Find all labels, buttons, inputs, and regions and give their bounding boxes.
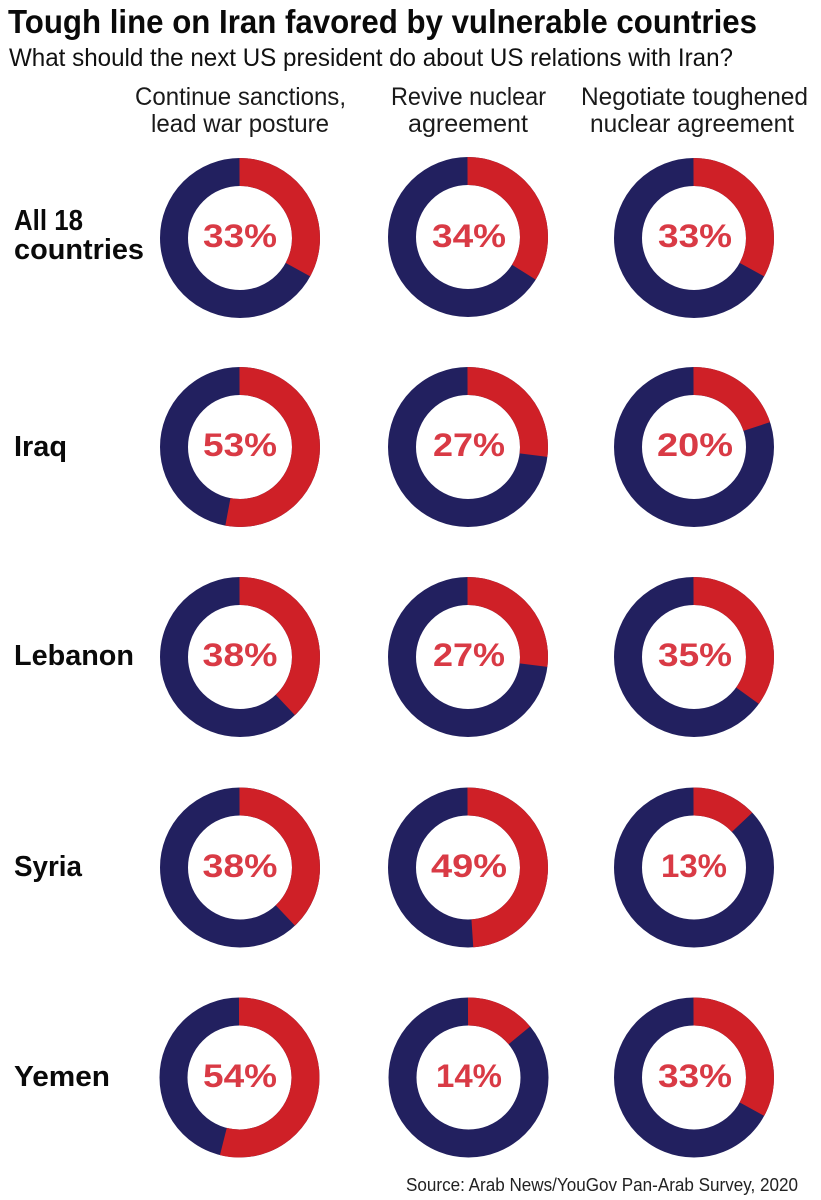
column heading: negotiate toughened nuclear agreement: Negotiate toughened	[581, 83, 808, 111]
donut: Lebanon, revive 27%: 27%	[433, 637, 505, 673]
column heading: negotiate toughened nuclear agreement: nuclear agreement	[590, 110, 794, 138]
title: Tough line on Iran favored by vulnerable countries	[8, 3, 757, 40]
donut: Syria, revive 49%: 49%	[431, 848, 507, 884]
donut: all 18, continue sanctions 33%: 33%	[203, 218, 277, 254]
donut: Syria, continue sanctions 38%	[174, 802, 306, 934]
subtitle: What should the next US president do about US relations with Iran?	[9, 44, 733, 72]
donut: Syria, negotiate 13%: 13%	[661, 848, 727, 884]
donut: Yemen, negotiate 33%	[628, 1012, 760, 1144]
donut: all 18, negotiate 33%: 33%	[658, 218, 732, 254]
column heading: continue sanctions: Continue sanctions,	[135, 83, 346, 111]
donut: Syria, continue sanctions 38%: 38%	[202, 848, 278, 884]
source note: Source: Arab News/YouGov Pan-Arab Survey, 2020	[406, 1175, 798, 1195]
donut: Yemen, continue sanctions 54%: 54%	[203, 1058, 277, 1094]
donut: Syria, revive 49%	[402, 802, 534, 934]
column heading: continue sanctions: lead war posture	[151, 110, 329, 138]
donut: Iraq, continue sanctions 53%: 53%	[203, 427, 277, 463]
row label: Iraq: Iraq	[14, 431, 67, 463]
donut: Iraq, revive 27%	[402, 381, 534, 513]
row label: Syria: Syria	[14, 851, 83, 883]
donut: Iraq, negotiate 20%	[628, 381, 760, 513]
row label: All 18 countries	[14, 205, 144, 266]
row label: Lebanon: Lebanon	[14, 640, 134, 672]
column heading: revive nuclear agreement: Revive nuclear	[391, 83, 546, 111]
column heading: revive nuclear agreement: agreement	[408, 110, 528, 138]
donut: Lebanon, negotiate 35%	[628, 591, 760, 723]
donut: all 18, revive 34%: 34%	[432, 218, 506, 254]
donut: Lebanon, continue sanctions 38%	[174, 591, 306, 723]
donut: all 18, continue sanctions 33%	[174, 172, 306, 304]
donut: Iraq, continue sanctions 53%	[174, 381, 306, 513]
donut: Yemen, continue sanctions 54%	[174, 1012, 306, 1144]
column heading: continue sanctions	[135, 83, 346, 138]
donut: Iraq, negotiate 20%: 20%	[657, 427, 733, 463]
donut: Lebanon, continue sanctions 38%: 38%	[202, 637, 278, 673]
donut: Syria, negotiate 13%	[628, 802, 760, 934]
donut: Iraq, revive 27%: 27%	[433, 427, 505, 463]
row label: Yemen: Yemen	[14, 1061, 110, 1093]
row label: All 18 countries: All 18	[14, 205, 83, 237]
donut: Yemen, revive 14%: 14%	[436, 1058, 502, 1094]
column heading: negotiate toughened nuclear agreement	[581, 83, 808, 138]
donut: Lebanon, negotiate 35%: 35%	[658, 637, 732, 673]
row label: All 18 countries: countries	[14, 234, 144, 266]
column heading: revive nuclear agreement	[391, 83, 546, 138]
donut: Lebanon, revive 27%	[402, 591, 534, 723]
donut: Yemen, revive 14%	[402, 1012, 534, 1144]
donut: all 18, revive 34%	[402, 171, 534, 303]
donut: all 18, negotiate 33%	[628, 172, 760, 304]
donut: Yemen, negotiate 33%: 33%	[658, 1058, 732, 1094]
